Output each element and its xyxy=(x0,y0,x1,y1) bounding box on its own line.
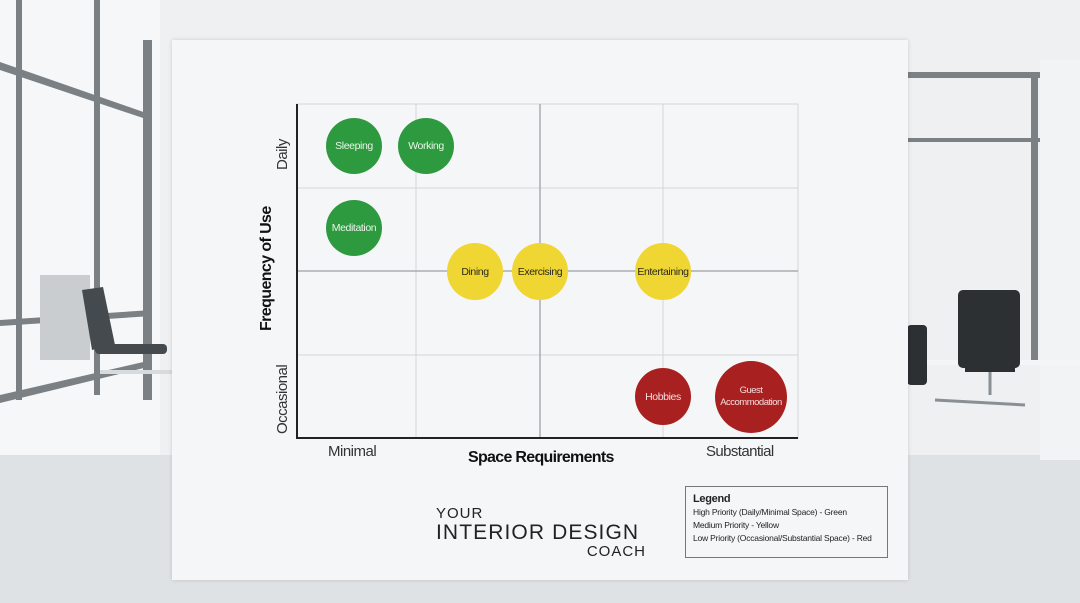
legend: High Priority (Daily/Minimal Space) - Green xyxy=(693,507,847,517)
legend: Medium Priority - Yellow xyxy=(693,520,779,530)
chart: Occasional xyxy=(274,365,291,434)
axis labels: Daily xyxy=(274,139,291,170)
chart: Substantial xyxy=(706,443,774,460)
bubbles: Sleeping xyxy=(335,140,373,152)
chart: Guest xyxy=(740,385,762,396)
legend: Legend xyxy=(693,493,730,505)
logo: INTERIOR DESIGN xyxy=(436,521,639,544)
chart: Space Requirements xyxy=(468,449,614,466)
chart: Working xyxy=(408,140,444,152)
logo xyxy=(436,505,646,560)
chart xyxy=(258,104,798,466)
chart: Entertaining xyxy=(637,266,689,278)
board xyxy=(172,40,908,580)
logo: COACH xyxy=(587,543,646,560)
chart: Hobbies xyxy=(645,390,681,402)
legend: Low Priority (Occasional/Substantial Space) - Red xyxy=(693,533,872,543)
chart: Dining xyxy=(461,266,489,278)
bubbles xyxy=(326,118,382,174)
chart: Minimal xyxy=(328,443,376,460)
chart: Frequency of Use xyxy=(258,206,275,331)
legend xyxy=(685,486,888,558)
chart: Accommodation xyxy=(720,397,782,408)
chart: Exercising xyxy=(518,266,562,278)
chart: Meditation xyxy=(332,222,376,234)
logo: YOUR xyxy=(436,505,483,522)
